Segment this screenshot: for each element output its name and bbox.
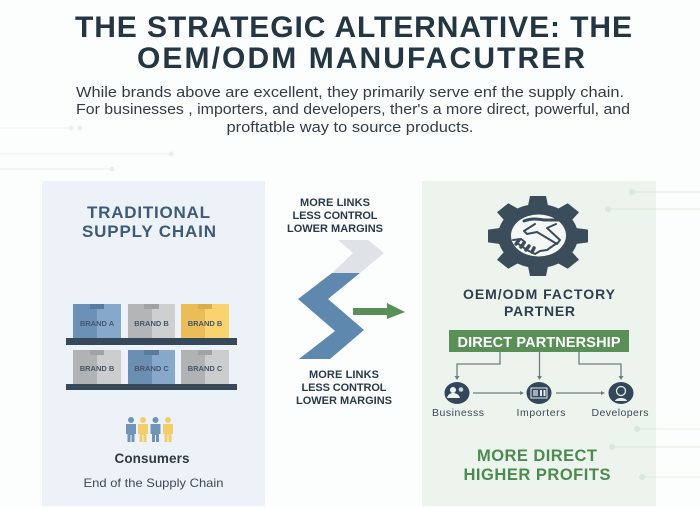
labels: audiences: Importers [516,407,566,419]
labels: audiences [432,407,648,419]
shelves with brand boxes: BRAND B [80,364,115,373]
callout: top margins text: LESS CONTROL [292,210,378,222]
callout: bottom margins text: LESS CONTROL [302,382,387,394]
heading: traditional supply chain: SUPPLY CHAIN [82,222,216,241]
heading: OEM/ODM factory partner: OEM/ODM FACTORY [463,286,616,302]
callout: top margins text: MORE LINKS [300,197,370,209]
title: OEM/ODM MANUFACUTRER [137,42,585,75]
callout: more direct higher profits [464,447,610,484]
panel: OEM/ODM factory partner [422,181,656,506]
intro text: proftatble way to source products. [226,119,474,136]
heading: traditional supply chain: TRADITIONAL [87,203,210,222]
icon: developers [608,382,634,404]
heading: traditional supply chain [82,203,216,241]
callout: bottom margins text: LOWER MARGINS [296,395,392,407]
callout: top margins text: LOWER MARGINS [287,223,383,235]
callout: more direct higher profits: MORE DIRECT [477,447,597,465]
title: THE STRATEGIC ALTERNATIVE: THE [75,11,632,44]
shelves with brand boxes [66,304,237,390]
shelves with brand boxes: BRAND C [134,364,169,373]
labels: audiences: Developers [592,407,648,419]
labels: audiences: Businesss [432,407,484,419]
icon: importers [526,382,552,404]
panel: traditional supply chain [42,181,265,506]
callout: bottom margins text [296,369,392,407]
connectors: partnership to audiences [454,352,624,395]
intro text: For businesses , importers, and developers, ther's a more direct, powerful, and [76,101,630,118]
intro text: While brands above are excellent, they primarily serve enf the supply chain. [76,84,624,101]
icon: businesses [444,382,470,404]
shelves with brand boxes: BRAND A [80,319,115,328]
icon: zigzag chain arrow [298,240,384,359]
shelves with brand boxes: BRAND B [134,319,169,328]
icon: gear with handshake [488,196,588,276]
heading: OEM/ODM factory partner [463,286,616,319]
label: end of the supply chain: End of the Supply Chain [84,476,224,490]
callout: top margins text [287,197,383,235]
banner: direct partnership: DIRECT PARTNERSHIP [458,335,621,351]
title [75,11,632,75]
shelves with brand boxes: BRAND C [188,364,223,373]
callout: bottom margins text: MORE LINKS [309,369,379,381]
label: consumers: Consumers [114,451,190,466]
banner: direct partnership [449,330,629,352]
callout: more direct higher profits: HIGHER PROFITS [464,466,610,484]
icon: consumers [126,417,173,442]
shelves with brand boxes: BRAND B [188,319,223,328]
intro text [76,84,630,136]
heading: OEM/ODM factory partner: PARTNER [504,303,575,319]
arrow: to factory partner [353,303,405,319]
